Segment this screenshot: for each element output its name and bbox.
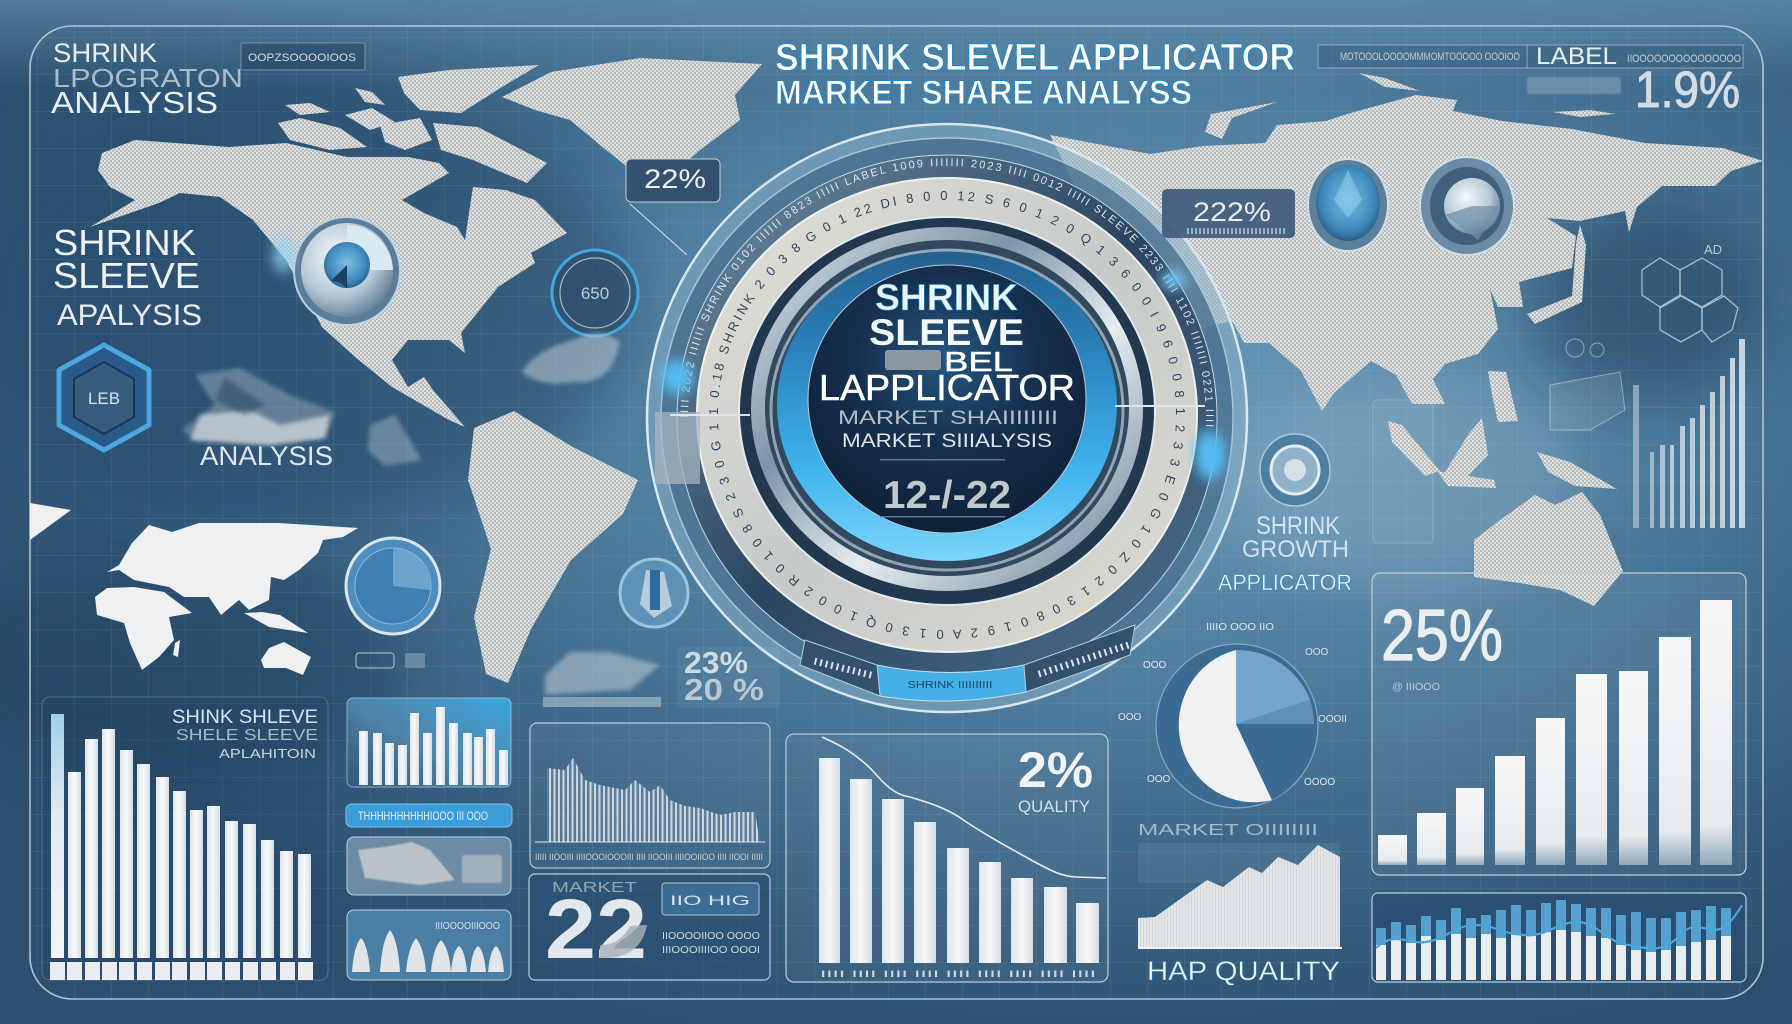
panel: descending bar chart [42, 697, 328, 980]
faded sketch panel [1373, 339, 1625, 543]
icon: silver dial button [1420, 157, 1514, 255]
area chart: market quality [1138, 822, 1342, 986]
panel: bullet shapes: IIIOOOOIIIOOO [435, 921, 500, 932]
South America [468, 411, 638, 683]
top-right label bar [1318, 43, 1743, 94]
center title: LAPPLICATOR [819, 367, 1075, 408]
top-left heading: ANALYSIS [51, 85, 218, 120]
panel: mixed bar and line chart [1372, 893, 1746, 982]
pie chart: OOOO [1304, 777, 1335, 788]
highlights [661, 360, 693, 394]
top-left badge [241, 43, 365, 70]
illustration: blurred machinery with analysis label: ANALYSIS [200, 441, 333, 471]
center title: SLEEVE [869, 312, 1024, 353]
shrink growth applicator label: APPLICATOR [1218, 570, 1352, 595]
blue glow ring [777, 249, 1117, 561]
icon: small gauge [522, 250, 638, 384]
top-right label bar: LABEL [1536, 43, 1617, 70]
icon: small circular badge [620, 559, 688, 627]
center title: MARKET SIIIALYSIS [842, 431, 1052, 452]
center disk [808, 265, 1086, 533]
pie chart: OOO [1147, 774, 1171, 785]
trend line [1376, 905, 1742, 949]
main circular emblem: IIII 2022 IIIIII SHRINK 0102 IIIIII 8823 IIIII LABEL 1009 IIIIIII 2023 IIII 0012 IIIII SLEEVE 2233 IIII 1102 IIIIIII 0221 IIII [680, 158, 1214, 426]
panel: blue button: THHHHHHHHHHIOOO III OOO [358, 809, 488, 823]
stat: 1.9%: 1.9% [1635, 61, 1740, 118]
left heading: shrink sleeve analysis: APALYSIS [57, 299, 202, 332]
center title: MARKET SHAIIIIIIII [838, 408, 1058, 429]
top-right label bar: IIOOOOOOOOOOOOOOO [1627, 53, 1741, 65]
bottom tabs [877, 665, 1026, 701]
left heading: shrink sleeve analysis: SLEEVE [53, 255, 200, 296]
area chart: market quality: MARKET OIIIIIIII [1138, 822, 1318, 839]
panel: rising bar chart with 25%: @ IIIOOO [1392, 682, 1440, 693]
center title: BEL [944, 346, 1013, 377]
callout: 222%: IIIIIIIIIIIIIIIIIIIIIIIII [1186, 227, 1286, 236]
top-left badge: OOPZSOOOOIOOS [248, 52, 356, 64]
panel: market stat 22: MARKET [552, 879, 637, 896]
icon: hexagon cluster [1642, 242, 1738, 342]
top-right label bar: MOTOOOLOOOOMMMOMTOOOOO OOOIOO [1340, 51, 1520, 63]
panel: market stat 22: IIIOOOIIIIOO OOOI [662, 945, 760, 956]
bars [51, 714, 311, 958]
steel band [677, 155, 1217, 681]
white bars [1376, 930, 1731, 980]
panel: rising bar chart with 25% [1372, 573, 1746, 875]
main title [775, 37, 1295, 112]
icon: circular growth badge [1260, 434, 1330, 506]
panel: machine image [347, 837, 511, 895]
small solid world map [30, 503, 358, 675]
panel: blue button [346, 804, 512, 827]
icon: hexagon badge: LEB [88, 389, 120, 408]
illustration with stat: 23% 20% [543, 645, 780, 708]
pie chart [1118, 622, 1347, 808]
icon: hexagon badge [59, 345, 149, 450]
panel: market stat 22: 22 [545, 882, 647, 976]
main circular emblem: IIIIIIIIIIIIIIIII [1036, 640, 1132, 681]
panel: dense line histogram: IIIII IIOOIII IIIIOOOIOOOIII IIII IIOOIII IIIIOOIIOO IIII IIOOI IIIII [535, 852, 763, 862]
illustration with stat: 23% 20%: 20 % [684, 672, 764, 707]
panel heading: SHINK SHLEVE [172, 707, 318, 728]
trend line [822, 737, 1106, 878]
center title: SHRINK [875, 277, 1018, 318]
panel: bar chart with trend line [786, 734, 1108, 982]
Arctic islands [278, 65, 547, 183]
panel: market stat 22: IIOOOOIIOO OOOO [662, 931, 760, 942]
cream label ring [697, 178, 1197, 652]
panel: bar chart with trend line: IIII IIII IIII IIII IIII IIII IIII IIII IIII [820, 969, 1096, 979]
outer glass ring [647, 124, 1247, 712]
inner mechanical rings [739, 217, 1155, 605]
main circular emblem [646, 122, 1248, 714]
center title: 12-/-22 [883, 474, 1011, 517]
shrink growth applicator label: GROWTH [1242, 536, 1349, 563]
panel heading [172, 707, 318, 761]
top-left heading: SHRINK [53, 38, 157, 68]
pie chart: OOO [1118, 712, 1142, 723]
panel: bar chart with trend line: QUALITY [1018, 797, 1090, 816]
main circular emblem: SHRINK IIIIIIIIII [908, 680, 992, 691]
icon: hexagon cluster: AD [1704, 242, 1722, 257]
pie chart: OOOII [1318, 714, 1347, 725]
callout: 222% [1162, 189, 1295, 238]
top-left heading [51, 38, 243, 120]
illustration: blurred machinery with analysis label [182, 368, 422, 471]
icon: blue dial [346, 538, 440, 668]
icon: map gauge [273, 217, 400, 325]
icon: small gauge: 650 [581, 284, 609, 303]
panel: dense line histogram [530, 723, 770, 868]
panel: bullet shapes [347, 910, 511, 980]
icon: blue globe button [1308, 159, 1388, 251]
Asian islands and coastal fragments [1205, 73, 1617, 489]
bar chart: right vertical rising [1633, 339, 1745, 528]
panel: bar chart with trend line: 2% [1018, 742, 1093, 798]
panel: market stat 22 [529, 874, 770, 980]
left heading: shrink sleeve analysis: SHRINK [53, 222, 196, 263]
panel heading: APLAHITOIN [219, 746, 316, 761]
callout: 22% [626, 159, 720, 255]
panel: market stat 22: IIO HIG [670, 892, 750, 908]
pie chart: IIIIO OOO IIO [1206, 622, 1274, 633]
main title: SHRINK SLEVEL APPLICATOR [775, 37, 1295, 79]
Greenland [502, 58, 762, 185]
shrink growth applicator label [1218, 512, 1352, 595]
panel heading: SHELE SLEEVE [176, 727, 318, 744]
callout: 222%: 222% [1193, 197, 1271, 227]
North America [90, 140, 567, 427]
pie chart: OOO [1143, 660, 1167, 671]
Australia [1474, 492, 1623, 606]
panel: rising bar chart with 25%: 25% [1381, 596, 1503, 676]
blue bars [1376, 900, 1731, 968]
illustration with stat: 23% 20%: 23% [684, 645, 748, 680]
axis tags [50, 962, 313, 980]
main circular emblem: IIIIIIIIIII [811, 656, 874, 682]
area chart: market quality: HAP QUALITY [1147, 956, 1340, 986]
callout: 22%: 22% [644, 164, 706, 194]
Eurasia [1050, 95, 1763, 411]
main title: MARKET SHARE ANALYSS [775, 74, 1192, 112]
left heading: shrink sleeve analysis [53, 222, 202, 332]
center title [819, 277, 1075, 518]
shrink growth applicator label: SHRINK [1256, 512, 1340, 540]
world map: dotted continents [90, 58, 1763, 683]
main circular emblem: 1 0.18 SHRINK 2 0 3 8 G 0 1 22 DI 8 0 0 12 S 6 0 1 2 0 Q 1 3 6 0 0 I 9 6 0 0 8 1 2 3 3 E 0 G 1 0 Z 0 2 1 3 0 8 0 1 9 2 A 0 1 3 0 Q 1 0 0 2 R 0 1 0 8 S 2 3 0 G 1 0 2 [709, 190, 1185, 639]
panel: blue mini bars [347, 698, 511, 787]
pie chart: OOO [1305, 647, 1329, 658]
top-left heading: LPOGRATON [53, 63, 243, 93]
